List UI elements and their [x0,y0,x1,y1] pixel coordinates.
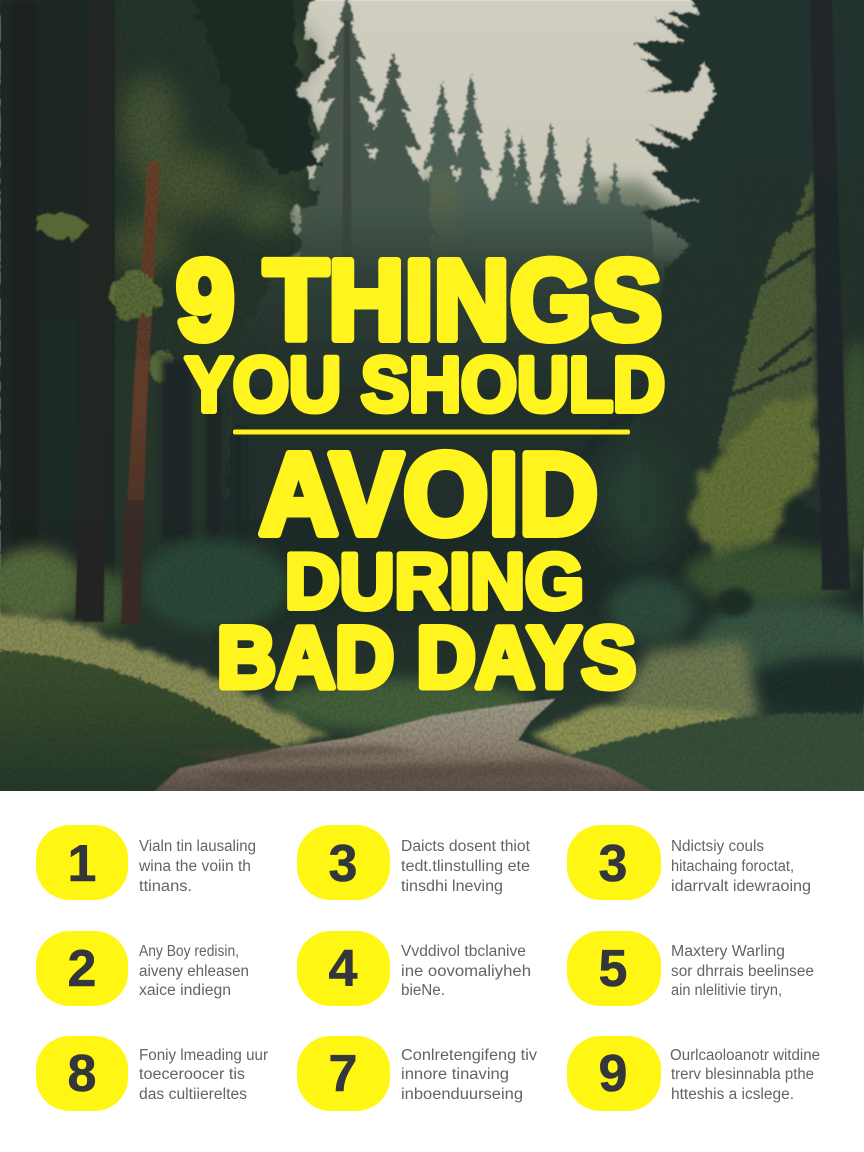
right fir silhouette [625,0,864,560]
item 9: trerv blesinnabla pthe [671,1066,814,1083]
item 3 (column 2): 3 [329,835,357,893]
left undergrowth [0,540,530,731]
item 8: das cultiiereltes [139,1086,247,1103]
item 1: wina the voiin th [138,858,251,875]
item grid [36,825,820,1111]
item 7: 7 [329,1045,357,1103]
item 4: 4 [329,940,358,998]
brown tree trunk [127,161,160,500]
item 1 [36,825,256,900]
lit haze on distant firs [420,166,458,206]
foliage speckle texture [0,0,864,791]
item 4: ine oovomaliyheh [401,963,531,980]
item 8: 8 [68,1045,96,1103]
right side foliage lit patches [600,340,864,680]
item 7: Conlretengifeng tiv [401,1047,537,1064]
dark inner canopy [185,0,318,175]
right tree trunk [810,0,850,590]
item 8 [36,1036,268,1111]
right lit clearing [600,640,760,730]
item 1: 1 [68,835,96,893]
item 2: aiveny ehleasen [139,963,249,980]
foliage over brown trunk [109,272,161,320]
item 5: 5 [599,940,627,998]
item 5: sor dhrrais beelinsee [671,963,814,980]
photo base tone [0,0,864,791]
left canopy lit patches [111,27,309,271]
right lit moss behind branches [717,172,818,457]
item 3 (column 2): tedt.tlinstulling ete [401,858,530,875]
item 2: xaice indiegn [139,982,231,999]
small foliage patch on trunks [36,211,84,241]
left foliage cluster [149,350,175,382]
sky [289,0,718,257]
forest photo background [0,0,864,820]
distant fir tree line [422,74,654,269]
item 2: Any Boy redisin, [139,943,239,960]
item 2: 2 [68,940,96,998]
left dark tree canopy [0,0,325,640]
title [176,237,665,706]
item 9 [567,1036,820,1111]
item 3 (column 2): tinsdhi lneving [401,878,503,895]
item 5: ain nlelitivie tiryn, [671,982,782,999]
item 3 (column 3): hitachaing foroctat, [671,858,794,875]
misty distant hill [593,172,690,266]
item 9: 9 [599,1045,627,1103]
item 7 [297,1036,537,1111]
item 5 [567,931,814,1006]
item 4 [297,931,531,1006]
title divider [233,430,630,434]
item 3 (column 3): 3 [599,835,627,893]
item 7: inboenduurseing [401,1086,523,1103]
item 1: ttinans. [139,878,192,895]
mid fir trees [296,0,436,269]
item 9: htteshis a icslege. [671,1086,794,1103]
left meadow [0,648,282,791]
title line: during: DURING [285,537,584,625]
item 9: Ourlcaoloanotr witdine [670,1047,820,1064]
item 8: Foniy lmeading uur [139,1047,268,1064]
title line: bad days: BAD DAYS [217,610,636,706]
background thin trunks [158,356,223,540]
item 3 (column 2): Daicts dosent thiot [401,838,531,855]
right hanging branches [706,164,815,450]
item 1: Vialn tin lausaling [139,838,256,855]
title line: avoid: AVOID [259,429,598,559]
title line: you should: YOU SHOULD [185,342,665,428]
central dark wood [247,194,699,744]
item 2 [36,931,249,1006]
right meadow lit strip [530,702,739,757]
item 3 (column 3) [567,825,811,900]
road shadow stripes [180,745,610,785]
dirt road [150,699,660,795]
left dark trunks [0,0,115,625]
item 8: toeceroocer tis [139,1066,245,1083]
item 7: innore tinaving [401,1066,509,1083]
right meadow [571,711,864,791]
item 4: bieNe. [401,982,445,999]
item 3 (column 3): Ndictsiy couls [671,838,764,855]
item 3 (column 3): idarrvalt idewraoing [671,878,811,895]
item 5: Maxtery Warling [671,943,785,960]
item 3 (column 2) [297,825,531,900]
trunks over undergrowth [74,558,105,622]
title line: 9 things: 9 THINGS [176,237,662,363]
tall fir trunk [343,20,351,231]
left meadow lit band [0,608,330,750]
right bottom dark bush [745,657,864,713]
item 4: Vvddivol tbclanive [401,943,526,960]
